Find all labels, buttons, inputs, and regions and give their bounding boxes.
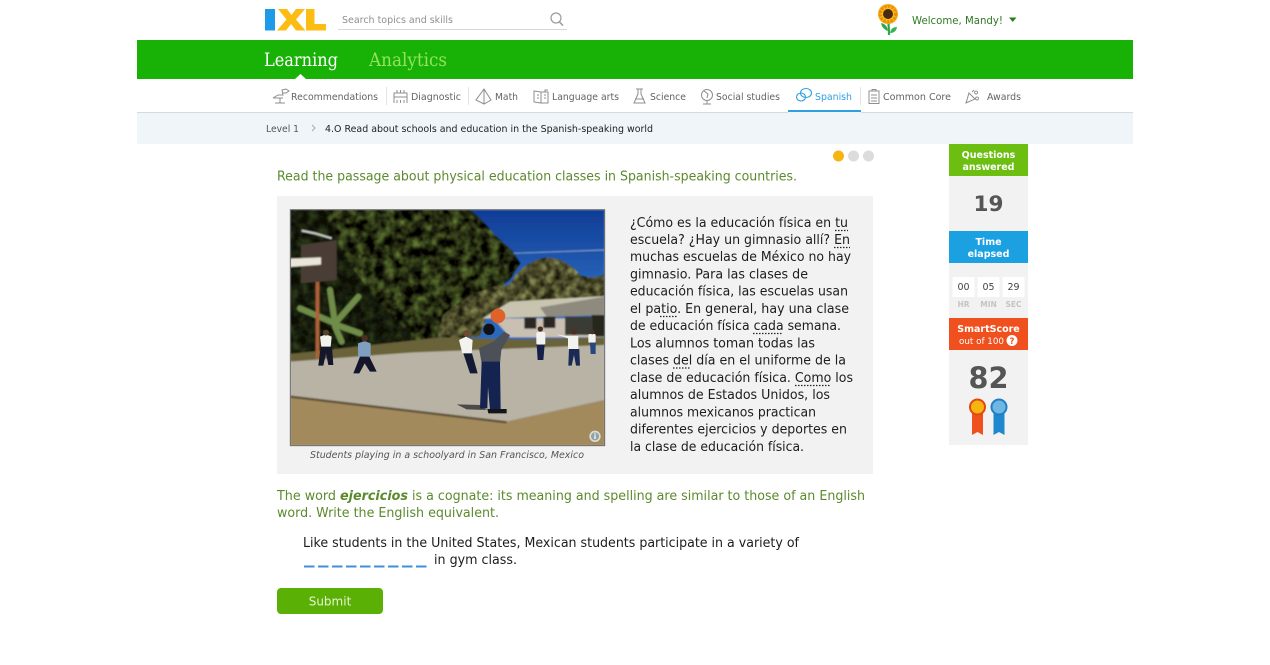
subject navigation xyxy=(273,87,1021,112)
passage text: la clase de educación física. xyxy=(630,440,804,455)
submit button: Submit xyxy=(309,594,352,608)
timer: SEC xyxy=(1005,300,1022,309)
smartscore value: 82 xyxy=(968,361,1008,395)
question prompt: word. Write the English equivalent. xyxy=(277,506,499,521)
passage text: gimnasio. Para las clases de xyxy=(630,268,808,282)
tree shadow xyxy=(290,210,420,354)
item: Common Core xyxy=(869,90,951,104)
timer: MIN xyxy=(980,300,997,309)
students xyxy=(318,309,596,413)
item: Language arts: Language arts xyxy=(552,92,619,103)
item: Recommendations xyxy=(273,89,378,103)
questions answered count: 19 xyxy=(974,192,1003,217)
item: Diagnostic xyxy=(394,90,461,103)
item: Spanish (active) xyxy=(788,88,861,112)
passage text: clases del día en el uniforme de la xyxy=(630,354,846,368)
instruction heading: Read the passage about physical education classes in Spanish-speaking countries. xyxy=(277,170,797,184)
header: logo and search xyxy=(265,9,567,30)
passage text: el patio. En general, hay una clase xyxy=(630,302,849,317)
progress dots xyxy=(833,150,874,162)
grass strip xyxy=(290,337,605,362)
passage text: de educación física cada semana. xyxy=(630,319,841,334)
item: Social studies xyxy=(702,90,780,104)
item: Common Core: Common Core xyxy=(883,92,951,103)
passage text: ¿Cómo es la educación física en tu xyxy=(630,216,848,231)
green navigation bar xyxy=(137,40,1133,79)
search box: Search topics and skills xyxy=(342,15,453,26)
item: Science: Science xyxy=(650,92,686,103)
pole and backboard xyxy=(316,282,319,359)
panel: reading passage xyxy=(277,196,873,474)
time elapsed header: elapsed xyxy=(968,249,1009,260)
main tree xyxy=(290,210,521,354)
breadcrumb bar: Level 1 xyxy=(266,124,299,135)
page canvas xyxy=(137,4,1133,614)
item: Spanish (active): Spanish xyxy=(815,92,852,103)
photo caption: Students playing in a schoolyard in San Francisco, Mexico xyxy=(310,450,584,461)
item: Language arts xyxy=(534,90,619,103)
passage text: diferentes ejercicios y deportes en xyxy=(630,422,847,438)
timer: 29 xyxy=(1007,282,1020,293)
boy with ball xyxy=(457,404,487,410)
tab: Analytics: Analytics xyxy=(368,49,447,71)
building xyxy=(493,318,605,337)
icon: photo info xyxy=(589,431,601,442)
item: Science xyxy=(634,89,686,103)
concrete court xyxy=(290,345,605,422)
timer: 05 xyxy=(982,282,995,293)
item: Math xyxy=(476,89,518,104)
welcome menu: Welcome, Mandy! xyxy=(912,15,1003,27)
dry ground xyxy=(290,396,605,446)
timer: 00 xyxy=(957,282,970,293)
question prompt: ejercicios xyxy=(340,489,408,504)
passage text: alumnos de Estados Unidos, los xyxy=(630,388,830,403)
passage text xyxy=(630,216,853,455)
submit button xyxy=(277,588,383,614)
question prompt: is a cognate: its meaning and spelling are similar to those of an English xyxy=(412,489,865,504)
question prompt: The word xyxy=(276,489,336,504)
passage text: alumnos mexicanos practican xyxy=(630,406,816,420)
passage text: escuela? ¿Hay un gimnasio allí? En xyxy=(630,233,850,248)
icon: sunflower avatar xyxy=(878,4,898,35)
item: Recommendations: Recommendations xyxy=(291,92,378,103)
breadcrumb bar: 4.O Read about schools and education in the Spanish-speaking world xyxy=(325,124,653,135)
breadcrumb bar xyxy=(137,112,1133,144)
time elapsed header xyxy=(949,231,1028,263)
photo: students playing in a schoolyard xyxy=(290,210,605,446)
questions answered header: answered xyxy=(963,162,1014,173)
questions answered header xyxy=(949,144,1028,176)
item: Social studies: Social studies xyxy=(716,92,780,103)
smartscore header xyxy=(949,318,1028,350)
palm xyxy=(300,290,360,342)
question prompt xyxy=(276,489,865,521)
icon: orange ribbon xyxy=(970,400,985,435)
fill-in sentence xyxy=(303,536,799,568)
timer: HR xyxy=(957,300,970,309)
questions answered header: Questions xyxy=(962,150,1016,161)
timer xyxy=(952,277,1024,309)
search box xyxy=(338,13,567,30)
smartscore header: out of 100 xyxy=(959,337,1004,347)
item: Awards xyxy=(966,90,1021,103)
fill-in sentence: Like students in the United States, Mexican students participate in a variety of xyxy=(303,536,799,551)
smartscore header: ? xyxy=(1010,337,1015,347)
passage text: clase de educación física. Como los xyxy=(630,371,853,386)
passage text: Los alumnos toman todas las xyxy=(630,336,815,352)
passage text: muchas escuelas de México no hay xyxy=(630,250,851,265)
middle tree xyxy=(436,284,509,339)
panel: statistics sidebar xyxy=(949,143,1028,445)
smartscore header: SmartScore xyxy=(957,324,1020,335)
active tab notch xyxy=(295,74,306,79)
tab: Learning: Learning xyxy=(264,49,338,71)
icon: IXL logo xyxy=(265,9,326,30)
fill-in sentence: in gym class. xyxy=(434,553,517,568)
item: Diagnostic: Diagnostic xyxy=(411,92,461,103)
background trees xyxy=(508,256,604,302)
item: Math: Math xyxy=(495,92,518,103)
item: Awards: Awards xyxy=(987,92,1021,103)
passage text: educación física, las escuelas usan xyxy=(630,284,848,300)
icon: blue ribbon xyxy=(992,400,1006,435)
time elapsed header: Time xyxy=(975,237,1002,248)
